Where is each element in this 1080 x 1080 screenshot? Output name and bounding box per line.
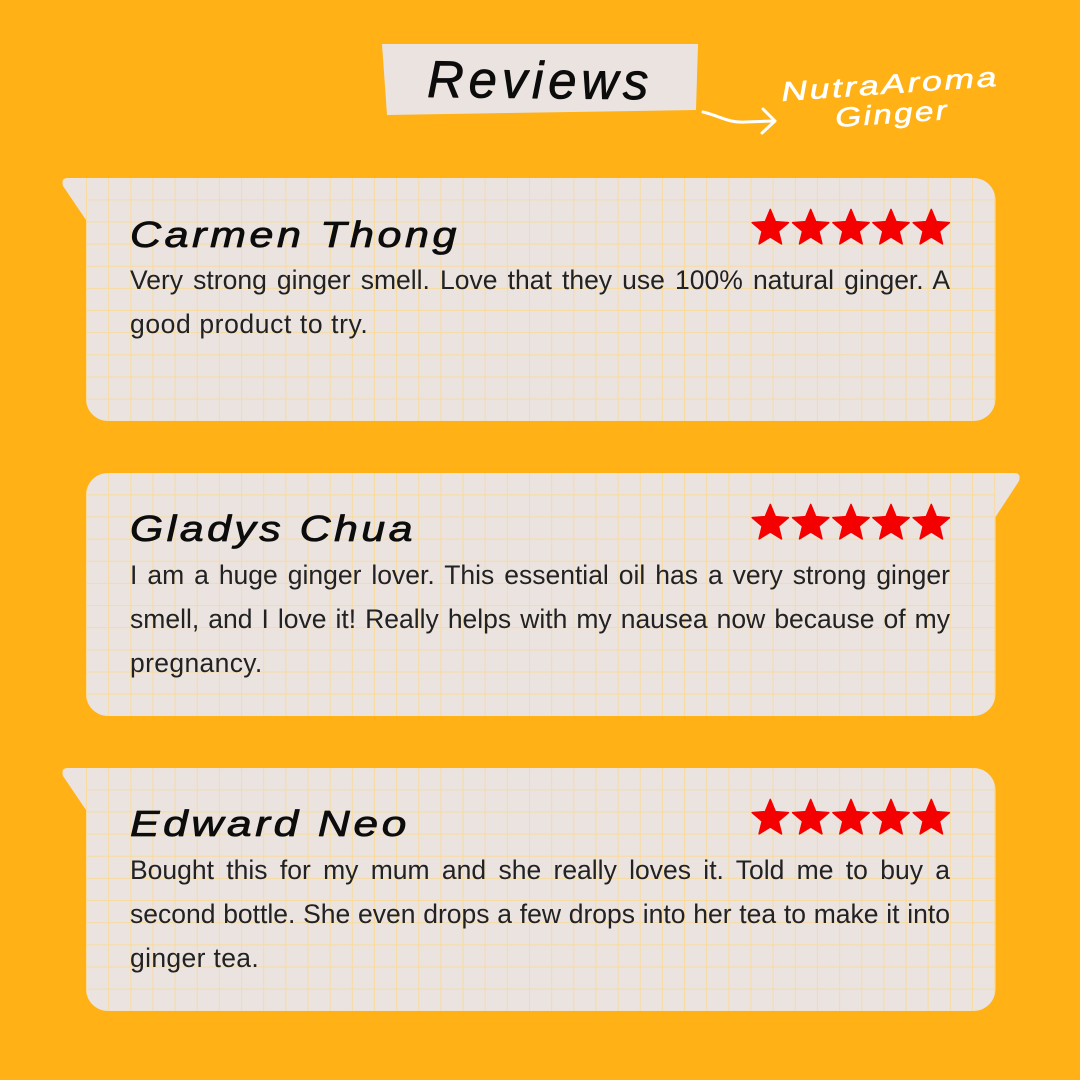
annotation: NutraAroma Ginger: Ginger — [834, 95, 950, 133]
review text: Very strong ginger smell. Love that they use 100% natural ginger. A — [130, 265, 950, 295]
five-star rating — [752, 210, 949, 244]
annotation: NutraAroma Ginger: NutraAroma — [780, 62, 1000, 107]
panel: review by Edward Neo — [62, 768, 996, 1011]
heading: Reviews paper label — [382, 44, 698, 115]
reviewer name: Edward Neo — [130, 803, 410, 844]
heading: Reviews paper label: Reviews — [427, 51, 653, 111]
panel: review by Carmen Thong — [62, 178, 996, 421]
review text: Bought this for my mum and she really loves it. Told me to buy a — [130, 855, 950, 885]
five-star rating — [752, 800, 949, 834]
review text — [130, 560, 950, 678]
review text — [130, 265, 950, 339]
review text: smell, and I love it! Really helps with my nausea now because of my — [130, 604, 950, 634]
review text — [130, 855, 950, 973]
review text: pregnancy. — [130, 648, 263, 678]
review text: good product to try. — [130, 309, 368, 339]
review text: I am a huge ginger lover. This essential oil has a very strong ginger — [130, 560, 950, 590]
review text: second bottle. She even drops a few drops into her tea to make it into — [130, 899, 950, 929]
reviewer name: Carmen Thong — [130, 214, 460, 255]
five-star rating — [752, 504, 949, 539]
reviewer name: Gladys Chua — [130, 508, 416, 549]
review text: ginger tea. — [130, 943, 259, 973]
panel: review by Gladys Chua — [86, 473, 1020, 716]
